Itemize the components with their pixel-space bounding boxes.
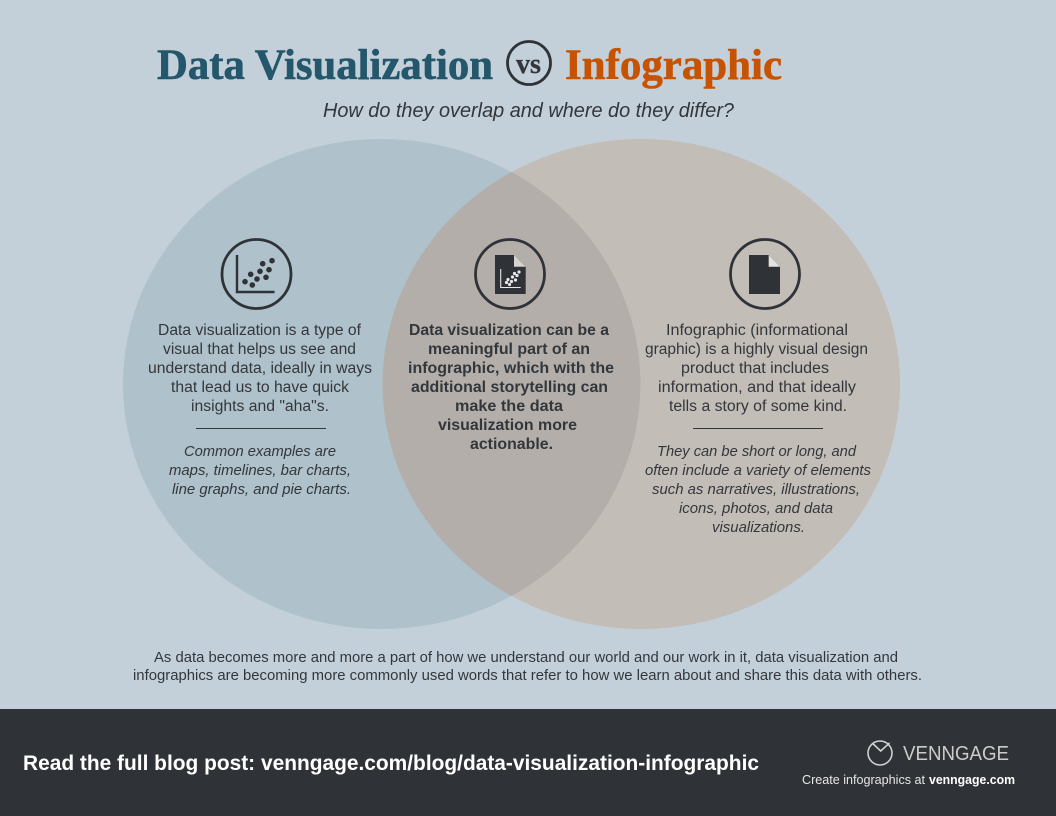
circle: infographic (383, 139, 900, 629)
footer bar: venngage.com (929, 772, 1015, 787)
text: infographic details: often include a variety of elements (645, 462, 871, 479)
text: overlap description: Data visualization can be a (409, 322, 609, 339)
icon: scatter plot (222, 240, 291, 308)
text: infographic details: such as narratives, illustrations, (652, 481, 860, 498)
text: infographic details (645, 443, 871, 536)
footer call to action: Read the full blog post: venngage.com/blog/data-visualization-infographic (23, 751, 759, 775)
text: overlap description: additional storytelling can (411, 379, 608, 396)
text: data visualization definition: that lead us to have quick (171, 379, 349, 396)
text: infographic definition: information, and that ideally (658, 379, 856, 396)
footer credit: Create infographics at (802, 772, 925, 787)
text: overlap description: actionable. (470, 436, 553, 453)
icon: document (730, 240, 800, 308)
text: data visualization definition: visual that helps us see and (163, 341, 356, 358)
text: overlap description: make the data (455, 398, 563, 415)
venngage logo: VENNGAGE (903, 743, 1009, 765)
title (157, 42, 782, 89)
text: data visualization examples: line graphs, and pie charts. (172, 481, 351, 498)
text: data visualization definition (148, 322, 372, 415)
text: infographic definition: Infographic (informational (666, 322, 848, 339)
text: overlap description (408, 322, 614, 453)
text: data visualization definition: Data visualization is a type of (158, 322, 362, 339)
text: closing paragraph: infographics are becoming more commonly used words that refer to how we learn about and share this data with others. (133, 668, 922, 684)
text: infographic definition (645, 322, 868, 415)
venn diagram (123, 139, 900, 629)
text: overlap description: meaningful part of an (428, 341, 590, 358)
text: infographic definition: product that includes (681, 360, 829, 377)
venngage logo (868, 741, 1009, 765)
text: infographic details: They can be short or long, and (657, 443, 857, 460)
icon: document with scatter plot (476, 240, 544, 308)
text: infographic definition: graphic) is a highly visual design (645, 341, 868, 358)
text: overlap description: visualization more (438, 417, 577, 434)
text: data visualization definition: insights and "aha"s. (191, 398, 329, 415)
text: data visualization examples (169, 443, 351, 498)
footer bar (0, 709, 1056, 816)
text: closing paragraph: As data becomes more and more a part of how we understand our world and our work in it, data visualization and (154, 650, 898, 666)
text: infographic details: icons, photos, and data (679, 500, 833, 517)
text: infographic definition: tells a story of some kind. (669, 398, 847, 415)
subtitle: How do they overlap and where do they differ? (323, 100, 735, 122)
text: closing paragraph (133, 650, 922, 684)
text: data visualization examples: maps, timelines, bar charts, (169, 462, 351, 479)
text: infographic details: visualizations. (712, 519, 805, 536)
title: Infographic (565, 42, 782, 89)
text: data visualization definition: understand data, ideally in ways (148, 360, 372, 377)
text: data visualization examples: Common examples are (184, 443, 336, 460)
vs badge: vs (516, 49, 541, 80)
title: Data Visualization (157, 42, 493, 89)
overlap region (383, 172, 640, 596)
vs badge (508, 42, 550, 84)
circle: data visualization (123, 139, 640, 629)
text: overlap description: infographic, which with the (408, 360, 614, 377)
